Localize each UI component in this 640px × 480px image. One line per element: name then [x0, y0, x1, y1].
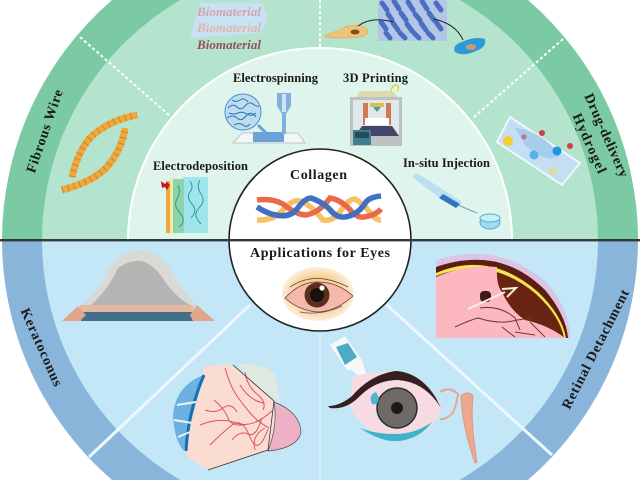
- icon: biomaterial film: Biomaterial: [196, 4, 261, 19]
- icon: drug-delivery hydrogel: [497, 117, 580, 185]
- icon: conjunctiva globe: [173, 364, 301, 470]
- heading: Fibrous Wire: Fibrous Wire: [24, 88, 67, 175]
- divider line: [0, 239, 640, 241]
- label: Electrodeposition: Electrodeposition: [153, 159, 248, 173]
- icon: syringe: [412, 173, 500, 229]
- icon: fibrous wire: [62, 115, 137, 190]
- icon: keratoconus cornea: [62, 250, 215, 321]
- heading: Keratoconus: Keratoconus: [17, 306, 65, 390]
- label: In-situ Injection: In-situ Injection: [403, 156, 490, 170]
- icon: retinal detachment: [436, 254, 570, 338]
- icon: cells on scaffold: [325, 0, 485, 54]
- icon: red eye: [282, 267, 354, 321]
- icon: biomaterial film: Biomaterial: [196, 37, 261, 52]
- icon: biomaterial film: Biomaterial: [196, 20, 261, 35]
- heading: Drug-delivery: Drug-delivery: [580, 91, 631, 180]
- heading: Retinal Detachment: Retinal Detachment: [560, 287, 633, 412]
- label: Collagen: Collagen: [290, 168, 347, 183]
- label: 3D Printing: 3D Printing: [343, 71, 409, 85]
- icon: 3D printer: [350, 85, 402, 146]
- icon: biomaterial film: [190, 3, 268, 52]
- label: Applications for Eyes: Applications for Eyes: [250, 246, 391, 261]
- panel: lower blue semicircle: [2, 240, 638, 480]
- icon: collagen helix: [257, 196, 381, 220]
- icon: electrospinning: [225, 93, 305, 143]
- icon: electrodeposition: [161, 177, 208, 233]
- label: Electrospinning: Electrospinning: [233, 71, 319, 85]
- panel: central circle: [229, 149, 411, 331]
- panel: upper green semicircle: [2, 0, 638, 240]
- icon: eye drop on red eye: [328, 336, 477, 463]
- heading: Hydrogel: Hydrogel: [569, 111, 609, 176]
